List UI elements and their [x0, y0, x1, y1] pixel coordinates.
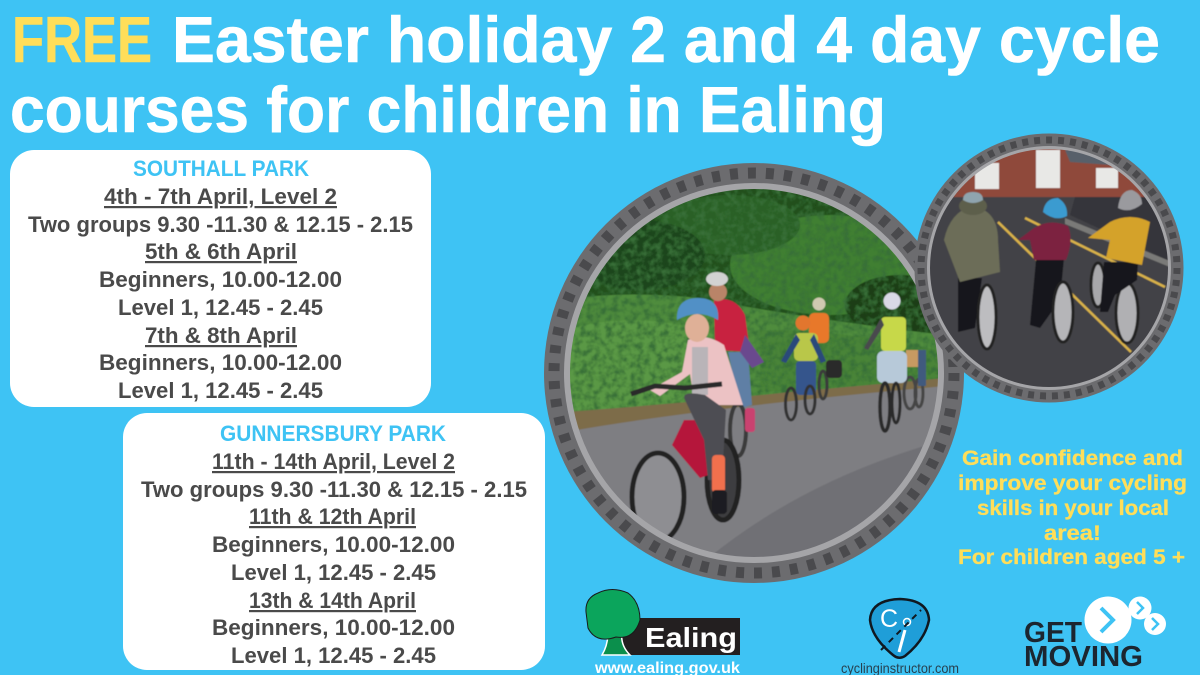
callout: course benefits and age [958, 447, 1187, 569]
logo: Get Moving [1024, 596, 1166, 673]
session list: Gunnersbury Park: 11th - 14th April, Level 2 [212, 449, 455, 474]
logo: cycling instructor [841, 599, 959, 675]
callout: course benefits and age: improve your cycling [958, 472, 1187, 495]
road verge [574, 378, 938, 430]
session list: Southall Park [28, 184, 413, 403]
session list: Gunnersbury Park [141, 449, 527, 668]
icon: tree [586, 590, 640, 655]
rider: girl on red bike [631, 298, 743, 541]
session list: Southall Park: Two groups 9.30 -11.30 & 12.15 - 2.15 [28, 212, 413, 237]
session list: Gunnersbury Park: Level 1, 12.45 - 2.45 [231, 643, 436, 668]
session list: Gunnersbury Park: Level 1, 12.45 - 2.45 [231, 560, 436, 585]
title: Easter holiday 2 and 4 day cycle [172, 3, 1160, 76]
title: courses for children in Ealing [10, 73, 886, 146]
photo: children cycling on a park road [570, 189, 938, 557]
session list: Southall Park: 7th & 8th April [145, 323, 297, 348]
session list: Gunnersbury Park: Two groups 9.30 -11.30 & 12.15 - 2.15 [141, 477, 527, 502]
small tyre photo frame [914, 134, 1184, 402]
large tyre photo frame [544, 163, 964, 583]
logo: Get Moving: MOVING [1024, 641, 1143, 673]
callout: course benefits and age: Gain confidence and [962, 447, 1183, 470]
session list: Gunnersbury Park: Beginners, 10.00-12.00 [212, 532, 455, 557]
session list: Southall Park: Level 1, 12.45 - 2.45 [118, 295, 323, 320]
rider: child in orange helmet [781, 316, 826, 420]
panel: Southall Park timetable [10, 150, 431, 407]
session list: Southall Park: Beginners, 10.00-12.00 [99, 267, 342, 292]
child: maroon jumper [1018, 198, 1073, 342]
logo: Ealing council: Ealing [645, 622, 737, 653]
session list: Gunnersbury Park: Beginners, 10.00-12.00 [212, 615, 455, 640]
session list: Gunnersbury Park: 11th & 12th April [249, 504, 416, 529]
panel: Gunnersbury Park timetable [123, 413, 545, 670]
callout: course benefits and age: For children aged 5 + [958, 546, 1185, 569]
logo: Ealing council [586, 590, 740, 675]
logo: Get Moving: GET [1024, 617, 1082, 649]
heading: Gunnersbury Park: GUNNERSBURY PARK [220, 421, 446, 446]
callout: course benefits and age: skills in your local [977, 497, 1169, 520]
session list: Southall Park: 4th - 7th April, Level 2 [104, 184, 337, 209]
tyre ring [544, 163, 964, 583]
rider: far adult [809, 298, 842, 399]
title [10, 3, 1160, 146]
rider: child in hi-vis vest [864, 292, 926, 431]
icon: chevron circles [1084, 596, 1166, 644]
callout: course benefits and age: area! [1044, 522, 1101, 545]
session list: Gunnersbury Park: 13th & 14th April [249, 588, 416, 613]
rider: woman in red [706, 272, 764, 456]
session list: Southall Park: Beginners, 10.00-12.00 [99, 350, 342, 375]
title: FREE [12, 3, 152, 76]
tyre ring [914, 134, 1184, 402]
child: yellow coat [1088, 190, 1150, 343]
foliage background [570, 189, 938, 412]
icon: Ci shield: C [880, 605, 898, 633]
heading: Southall Park: SOUTHALL PARK [133, 156, 309, 181]
session list: Southall Park: Level 1, 12.45 - 2.45 [118, 378, 323, 403]
photo: three children on bikes seen from behind [925, 145, 1175, 395]
road [579, 386, 938, 553]
session list: Southall Park: 5th & 6th April [145, 239, 297, 264]
child: olive coat [944, 192, 1000, 349]
